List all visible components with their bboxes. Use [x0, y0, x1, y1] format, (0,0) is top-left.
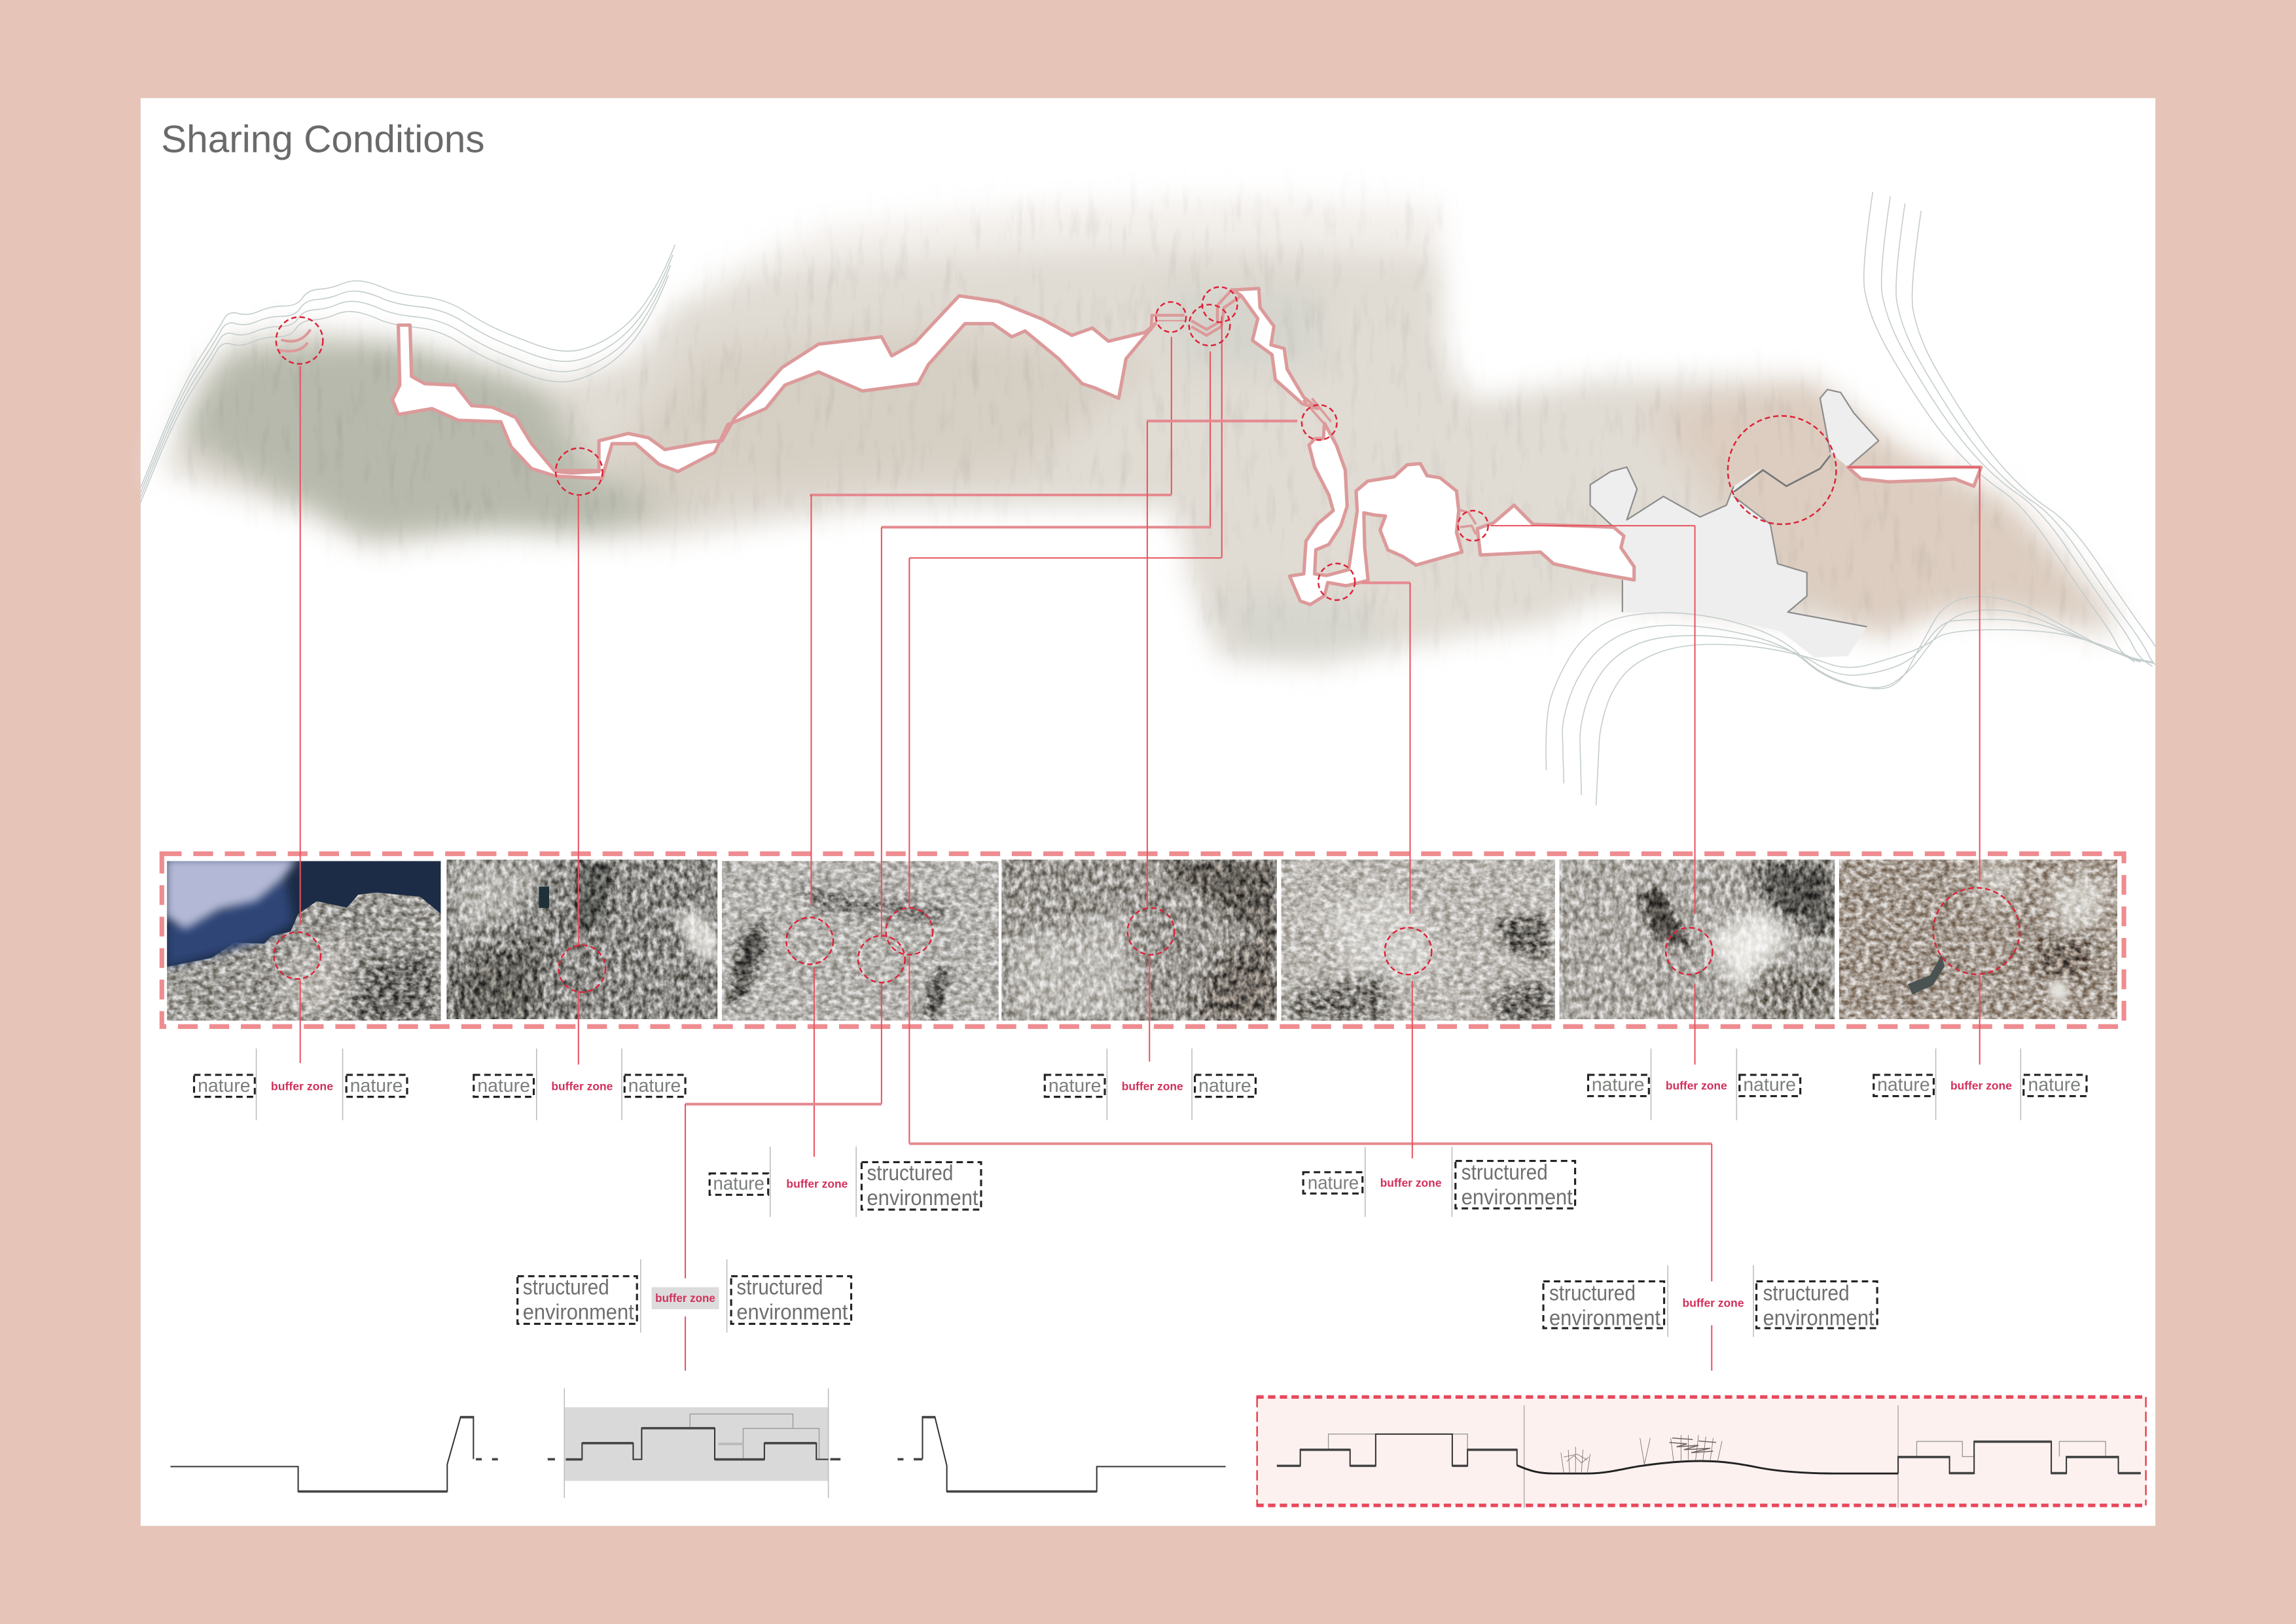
- label group 8: structured: [523, 1276, 609, 1300]
- label group 9: structured: [1763, 1282, 1850, 1306]
- label group 8: structured: [736, 1276, 823, 1300]
- label group 4: nature: [1592, 1075, 1644, 1096]
- gray territory: [1590, 389, 1878, 657]
- coastline: south-east: [1546, 597, 2154, 805]
- river buffer zone: eastern arm: [1458, 505, 1634, 580]
- label group 6: [709, 1147, 981, 1217]
- label group 7: buffer zone: [1380, 1176, 1442, 1189]
- trees: [1561, 1435, 1722, 1473]
- label group 3: nature: [1049, 1075, 1101, 1096]
- map: satellite base: [152, 190, 2123, 674]
- label group 3: nature: [1198, 1075, 1251, 1096]
- label group 9: [1543, 1265, 1877, 1337]
- internal border line in gray territory: [1734, 456, 1831, 492]
- label group 2: [474, 1049, 685, 1120]
- left buildings: [1277, 1434, 1517, 1466]
- label group 1: nature: [350, 1075, 403, 1096]
- label group 5: nature: [2028, 1075, 2081, 1096]
- coastline: north-east: [1863, 192, 2156, 666]
- label group 4: nature: [1743, 1075, 1796, 1096]
- satellite photo 5: [1282, 859, 1555, 1020]
- label group 2: buffer zone: [551, 1080, 613, 1093]
- satellite photo 1: [166, 858, 440, 1020]
- label group 5: nature: [1877, 1075, 1930, 1096]
- river buffer zone: western arm: [278, 296, 1155, 479]
- section: water channel left: [170, 1416, 498, 1492]
- label group 6: buffer zone: [786, 1177, 848, 1190]
- label group 8: environment: [523, 1301, 634, 1325]
- label group 7: nature: [1308, 1173, 1359, 1194]
- title: Sharing Conditions: [161, 118, 485, 161]
- label group 5: buffer zone: [1950, 1079, 2012, 1092]
- label group 8: environment: [736, 1301, 848, 1325]
- label group 6: environment: [867, 1186, 978, 1210]
- label group 8: [518, 1259, 852, 1333]
- label group 7: [1303, 1147, 1575, 1217]
- label group 9: structured: [1549, 1282, 1636, 1306]
- label group 9: buffer zone: [1683, 1297, 1744, 1310]
- satellite photo 2: [446, 859, 717, 1019]
- label group 9: environment: [1549, 1307, 1661, 1331]
- label group 1: [194, 1049, 407, 1120]
- river buffer zone: central arm south and lake: [1289, 424, 1462, 604]
- label group 3: [1045, 1049, 1255, 1120]
- label group 3: buffer zone: [1122, 1080, 1183, 1093]
- photo circles: [274, 888, 2020, 992]
- river buffer zone: central arm north: [1151, 289, 1331, 424]
- label group 6: nature: [713, 1174, 764, 1195]
- leader lines: [300, 316, 1980, 1371]
- label group 9: environment: [1763, 1307, 1874, 1331]
- label group 1: buffer zone: [271, 1080, 333, 1093]
- label group 2: nature: [477, 1075, 530, 1096]
- buffer zone highlight: [652, 1287, 719, 1309]
- satellite photo 7: [1839, 859, 2117, 1019]
- dashed frame around photos: [162, 854, 2124, 1026]
- right buildings: [1898, 1441, 2141, 1473]
- satellite photo 4: [1001, 859, 1277, 1020]
- map circles: [276, 287, 1836, 600]
- satellite photo 6: [1560, 859, 1835, 1019]
- label group 5: [1874, 1049, 2087, 1120]
- terrain: [1517, 1461, 1898, 1473]
- label group 4: buffer zone: [1666, 1079, 1727, 1092]
- section: structured urban middle: [548, 1388, 840, 1498]
- label group 2: nature: [628, 1075, 681, 1096]
- satellite photo 3: [722, 861, 999, 1020]
- section: water channel right: [897, 1416, 1226, 1492]
- label group 1: nature: [198, 1075, 251, 1096]
- white sheet: [141, 98, 2155, 1526]
- coastline: north-west: [134, 245, 675, 518]
- label group 8: buffer zone: [655, 1291, 715, 1305]
- river buffer zone: far east strip: [1848, 467, 1981, 486]
- label group 4: [1588, 1049, 1801, 1120]
- label group 7: environment: [1462, 1185, 1573, 1210]
- label group 7: structured: [1462, 1161, 1548, 1185]
- label group 6: structured: [867, 1161, 953, 1185]
- section: highlighted buffer: [1257, 1397, 2147, 1508]
